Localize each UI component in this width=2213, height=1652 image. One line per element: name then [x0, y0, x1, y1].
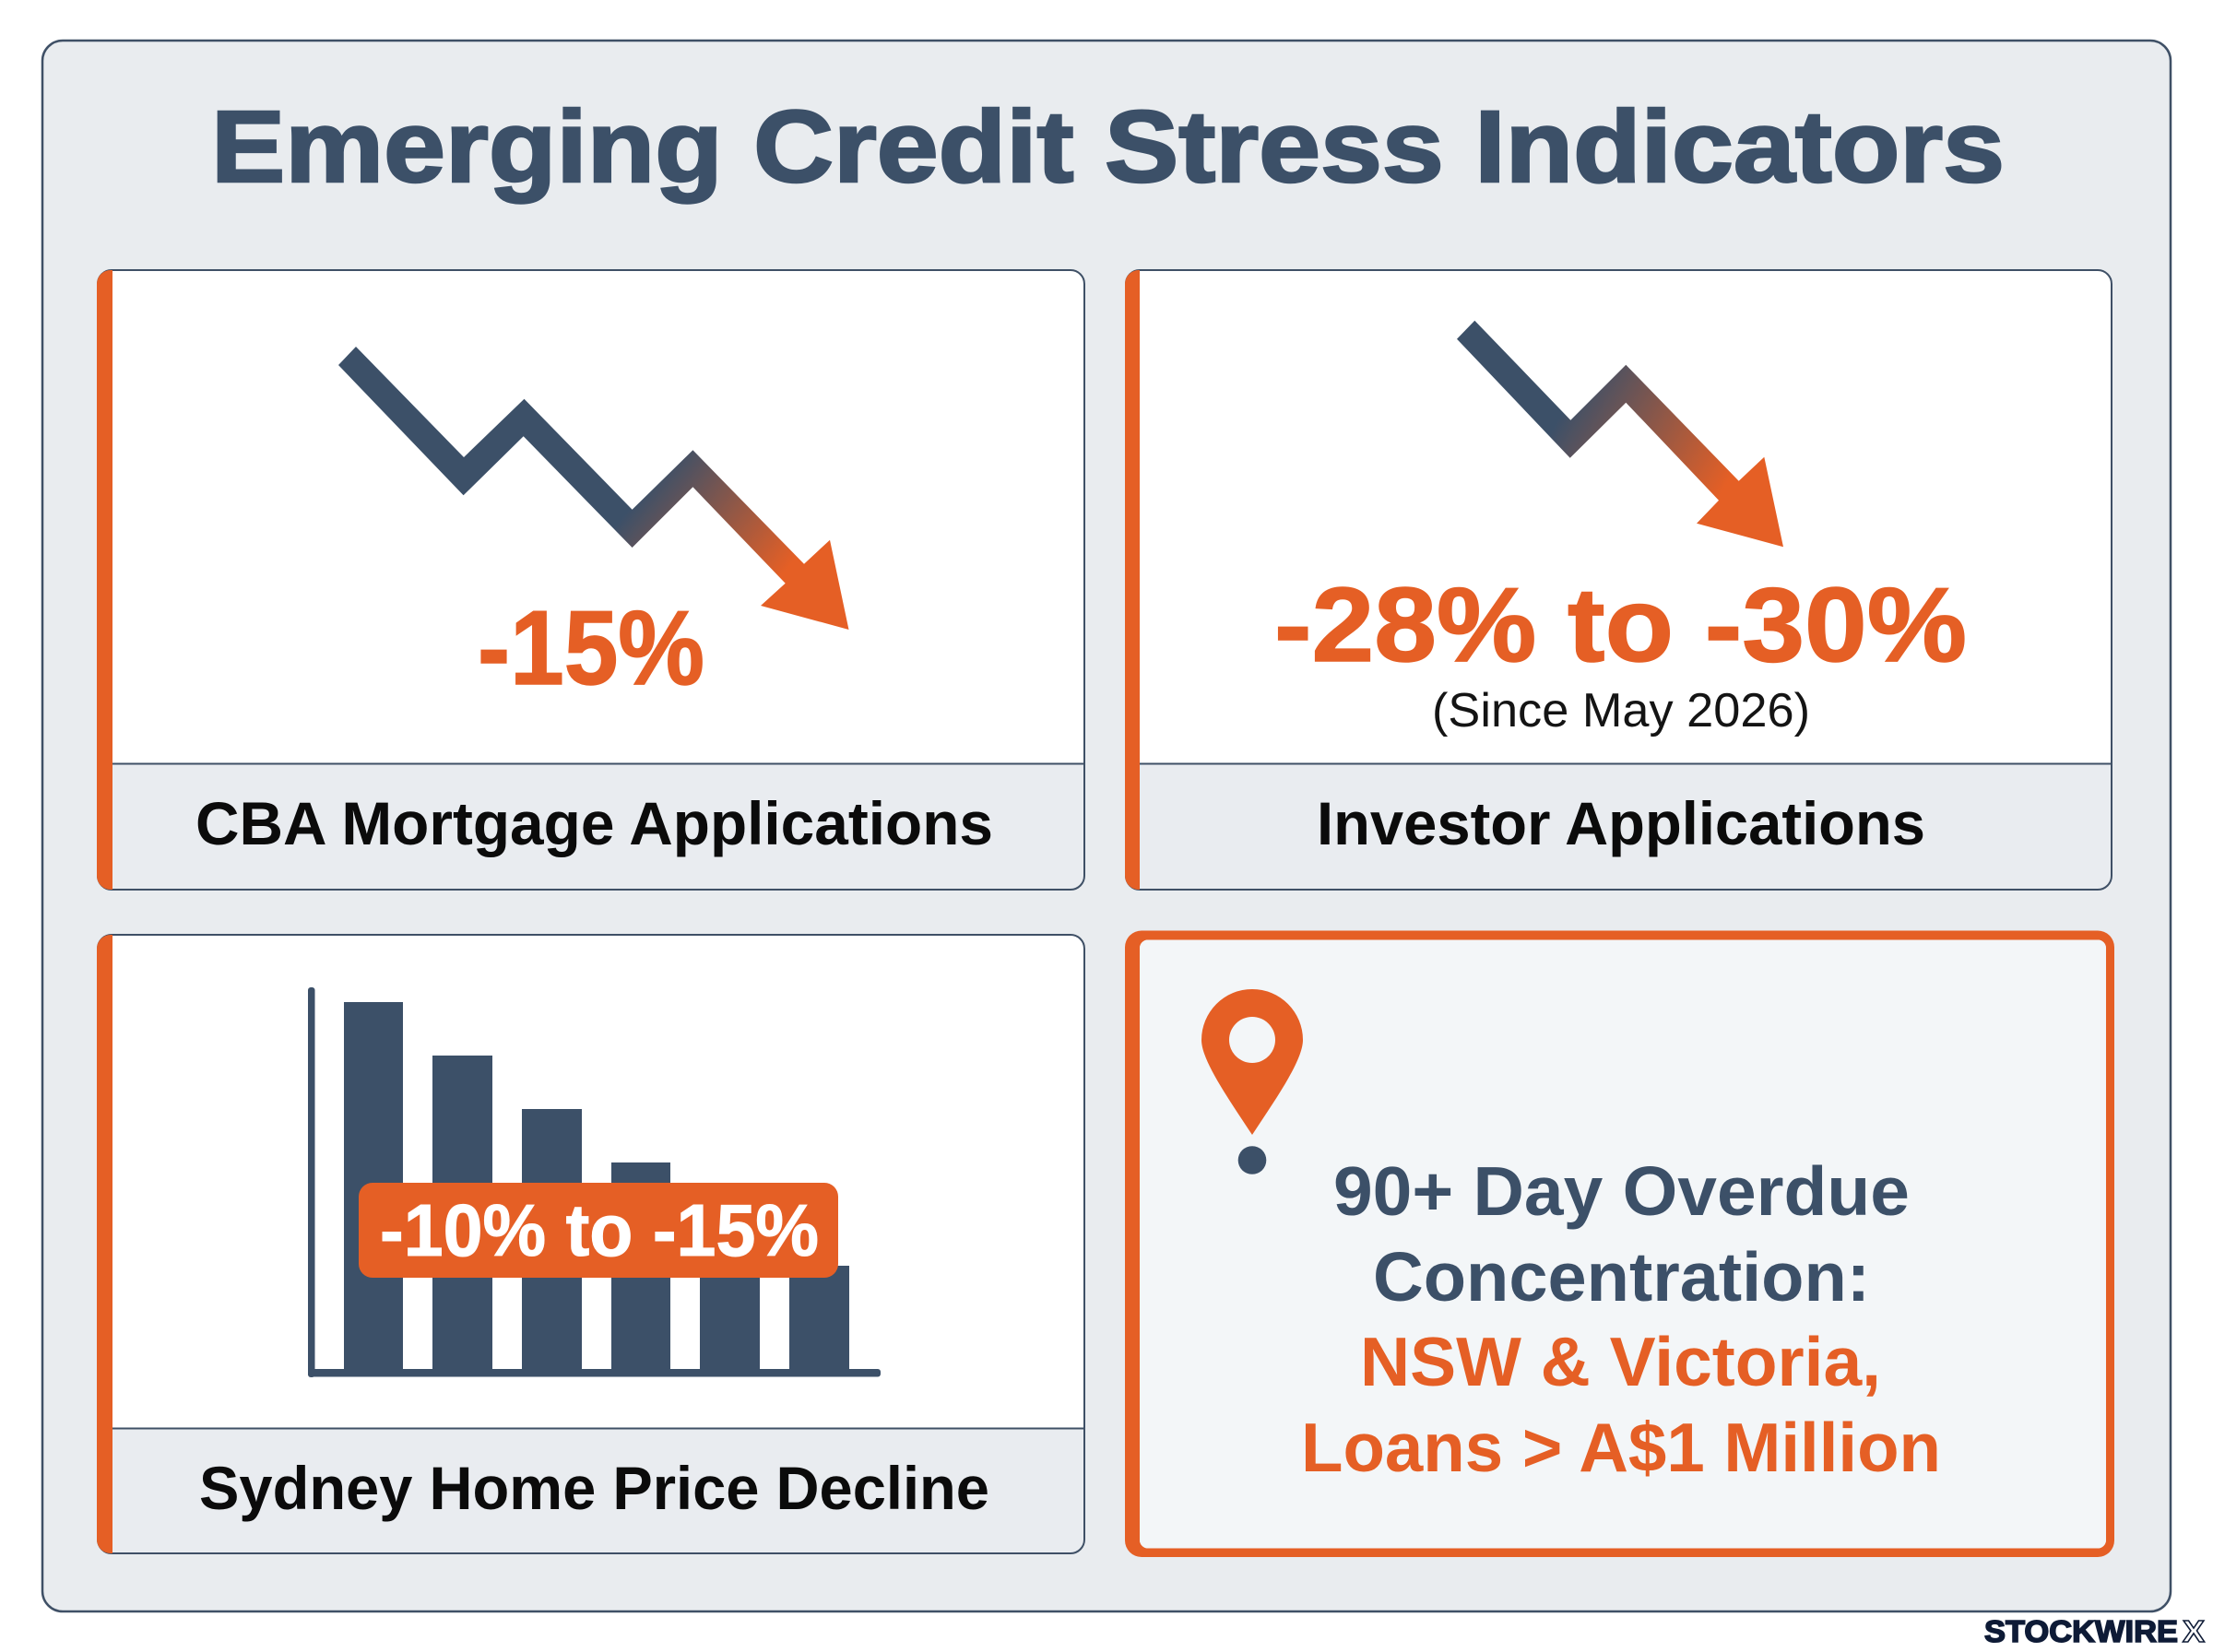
text: overdue concentration: Concentration: — [1373, 1238, 1870, 1316]
icon: zigzag down arrow — [1457, 321, 1783, 547]
text: overdue concentration: 90+ Day Overdue — [1333, 1152, 1910, 1230]
text: overdue concentration — [1301, 1152, 1941, 1486]
badge: -10% to -15%: -10% to -15% — [380, 1189, 819, 1271]
label: CBA Mortgage Applications: CBA Mortgage Applications — [195, 789, 993, 857]
logo: STOCKWIRE X: STOCKWIRE — [1984, 1614, 2178, 1648]
text: overdue concentration: Loans > A$1 Million — [1301, 1409, 1941, 1486]
label: Investor Applications: Investor Applications — [1317, 789, 1925, 857]
logo: STOCKWIRE X: X — [2183, 1614, 2205, 1648]
label: Sydney Home Price Decline: Sydney Home Price Decline — [199, 1454, 989, 1522]
stat: -15%: -15% — [478, 590, 704, 707]
panel: overdue concentration callout — [1125, 931, 2114, 1557]
panel: investor applications — [1125, 270, 2112, 890]
panel: Sydney home price decline — [97, 935, 1084, 1553]
title: Emerging Credit Stress Indicators — [211, 90, 2005, 204]
stat: -28% to -30%: -28% to -30% — [1274, 567, 1967, 684]
note: since May 2026: (Since May 2026) — [1432, 684, 1810, 738]
icon: zigzag down arrow — [338, 347, 848, 630]
bar chart — [308, 987, 881, 1377]
panel: CBA mortgage applications — [97, 270, 1084, 890]
icon: location pin — [1201, 989, 1303, 1174]
text: overdue concentration: NSW & Victoria, — [1360, 1323, 1881, 1400]
